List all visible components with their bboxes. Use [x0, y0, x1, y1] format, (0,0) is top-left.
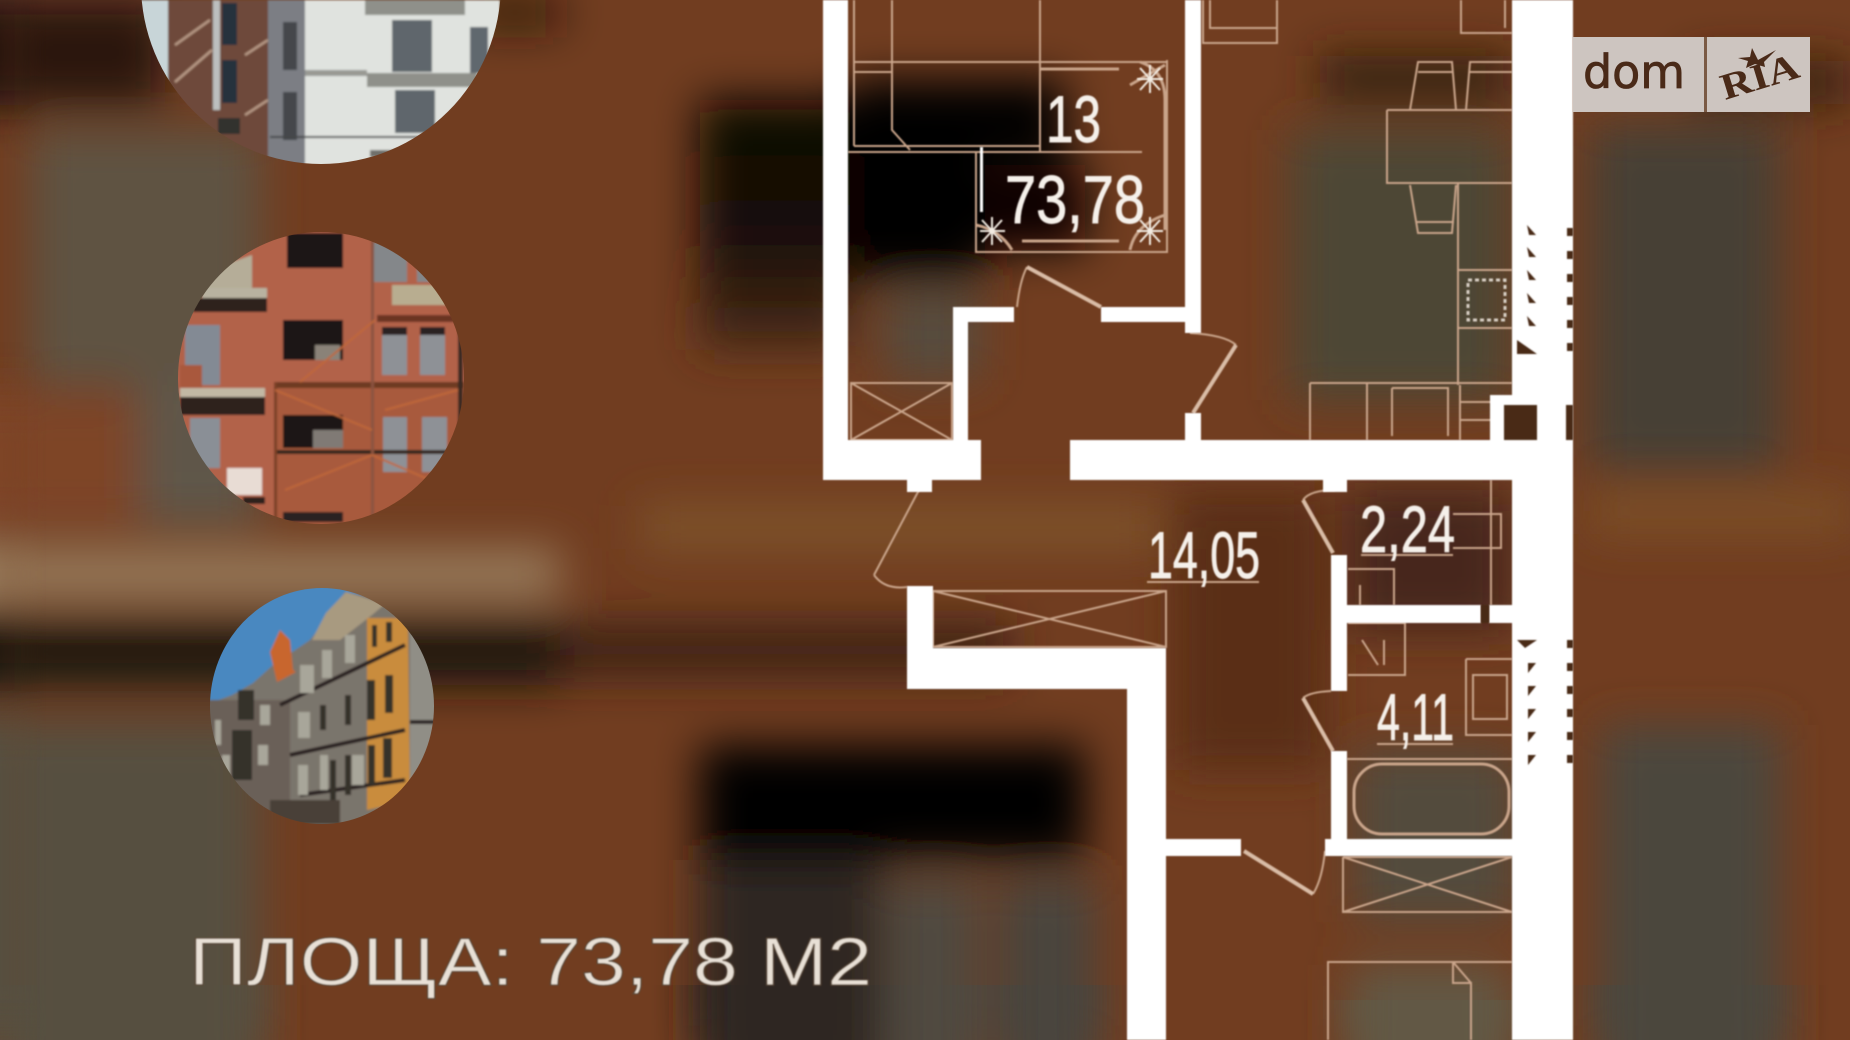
apartment number: 13	[1046, 82, 1101, 156]
room numbers	[1005, 82, 1455, 754]
photo circle: red brick facade with scaffolding	[178, 232, 464, 524]
logo: dom.ria badge	[1573, 37, 1810, 112]
sofa	[1203, 0, 1277, 43]
bathtub	[1347, 758, 1512, 760]
bedroom rug corner ornaments	[980, 65, 1163, 245]
washer and basin	[1348, 623, 1512, 735]
top right cabinet	[1461, 0, 1512, 33]
wc area: 2,24	[1360, 492, 1455, 566]
storage cross box	[1343, 857, 1512, 912]
wc sink and toilet	[1348, 480, 1501, 605]
lower bed	[1328, 962, 1512, 1040]
white walls	[823, 0, 1573, 1040]
wardrobe cross box	[851, 383, 952, 440]
shaft and vent openings	[1481, 225, 1573, 765]
doors	[874, 267, 1335, 894]
title: area label: ПЛОЩА: 73,78 М2	[189, 924, 872, 1000]
dining table and chairs	[1387, 62, 1512, 233]
total area: 73,78	[1005, 162, 1145, 238]
bedroom rug corners	[976, 62, 1165, 250]
logo word dom: dom	[1583, 45, 1685, 99]
photo circle: orange building against blue sky	[210, 588, 434, 824]
balcony cross box	[933, 591, 1166, 647]
bathroom area: 4,11	[1377, 680, 1454, 754]
floor plan	[823, 0, 1573, 1040]
lower kitchen cabinets	[1310, 383, 1512, 440]
logo word RIA: RIA	[1716, 46, 1804, 109]
kitchen counter and hob	[1458, 183, 1512, 385]
hall area: 14,05	[1148, 518, 1260, 592]
room underlines	[1147, 555, 1453, 744]
photo circle: white and brick tower	[142, 0, 500, 164]
furniture and fixture outlines	[848, 0, 1512, 1040]
bedroom bed	[848, 0, 1167, 252]
logo star	[1738, 48, 1776, 68]
